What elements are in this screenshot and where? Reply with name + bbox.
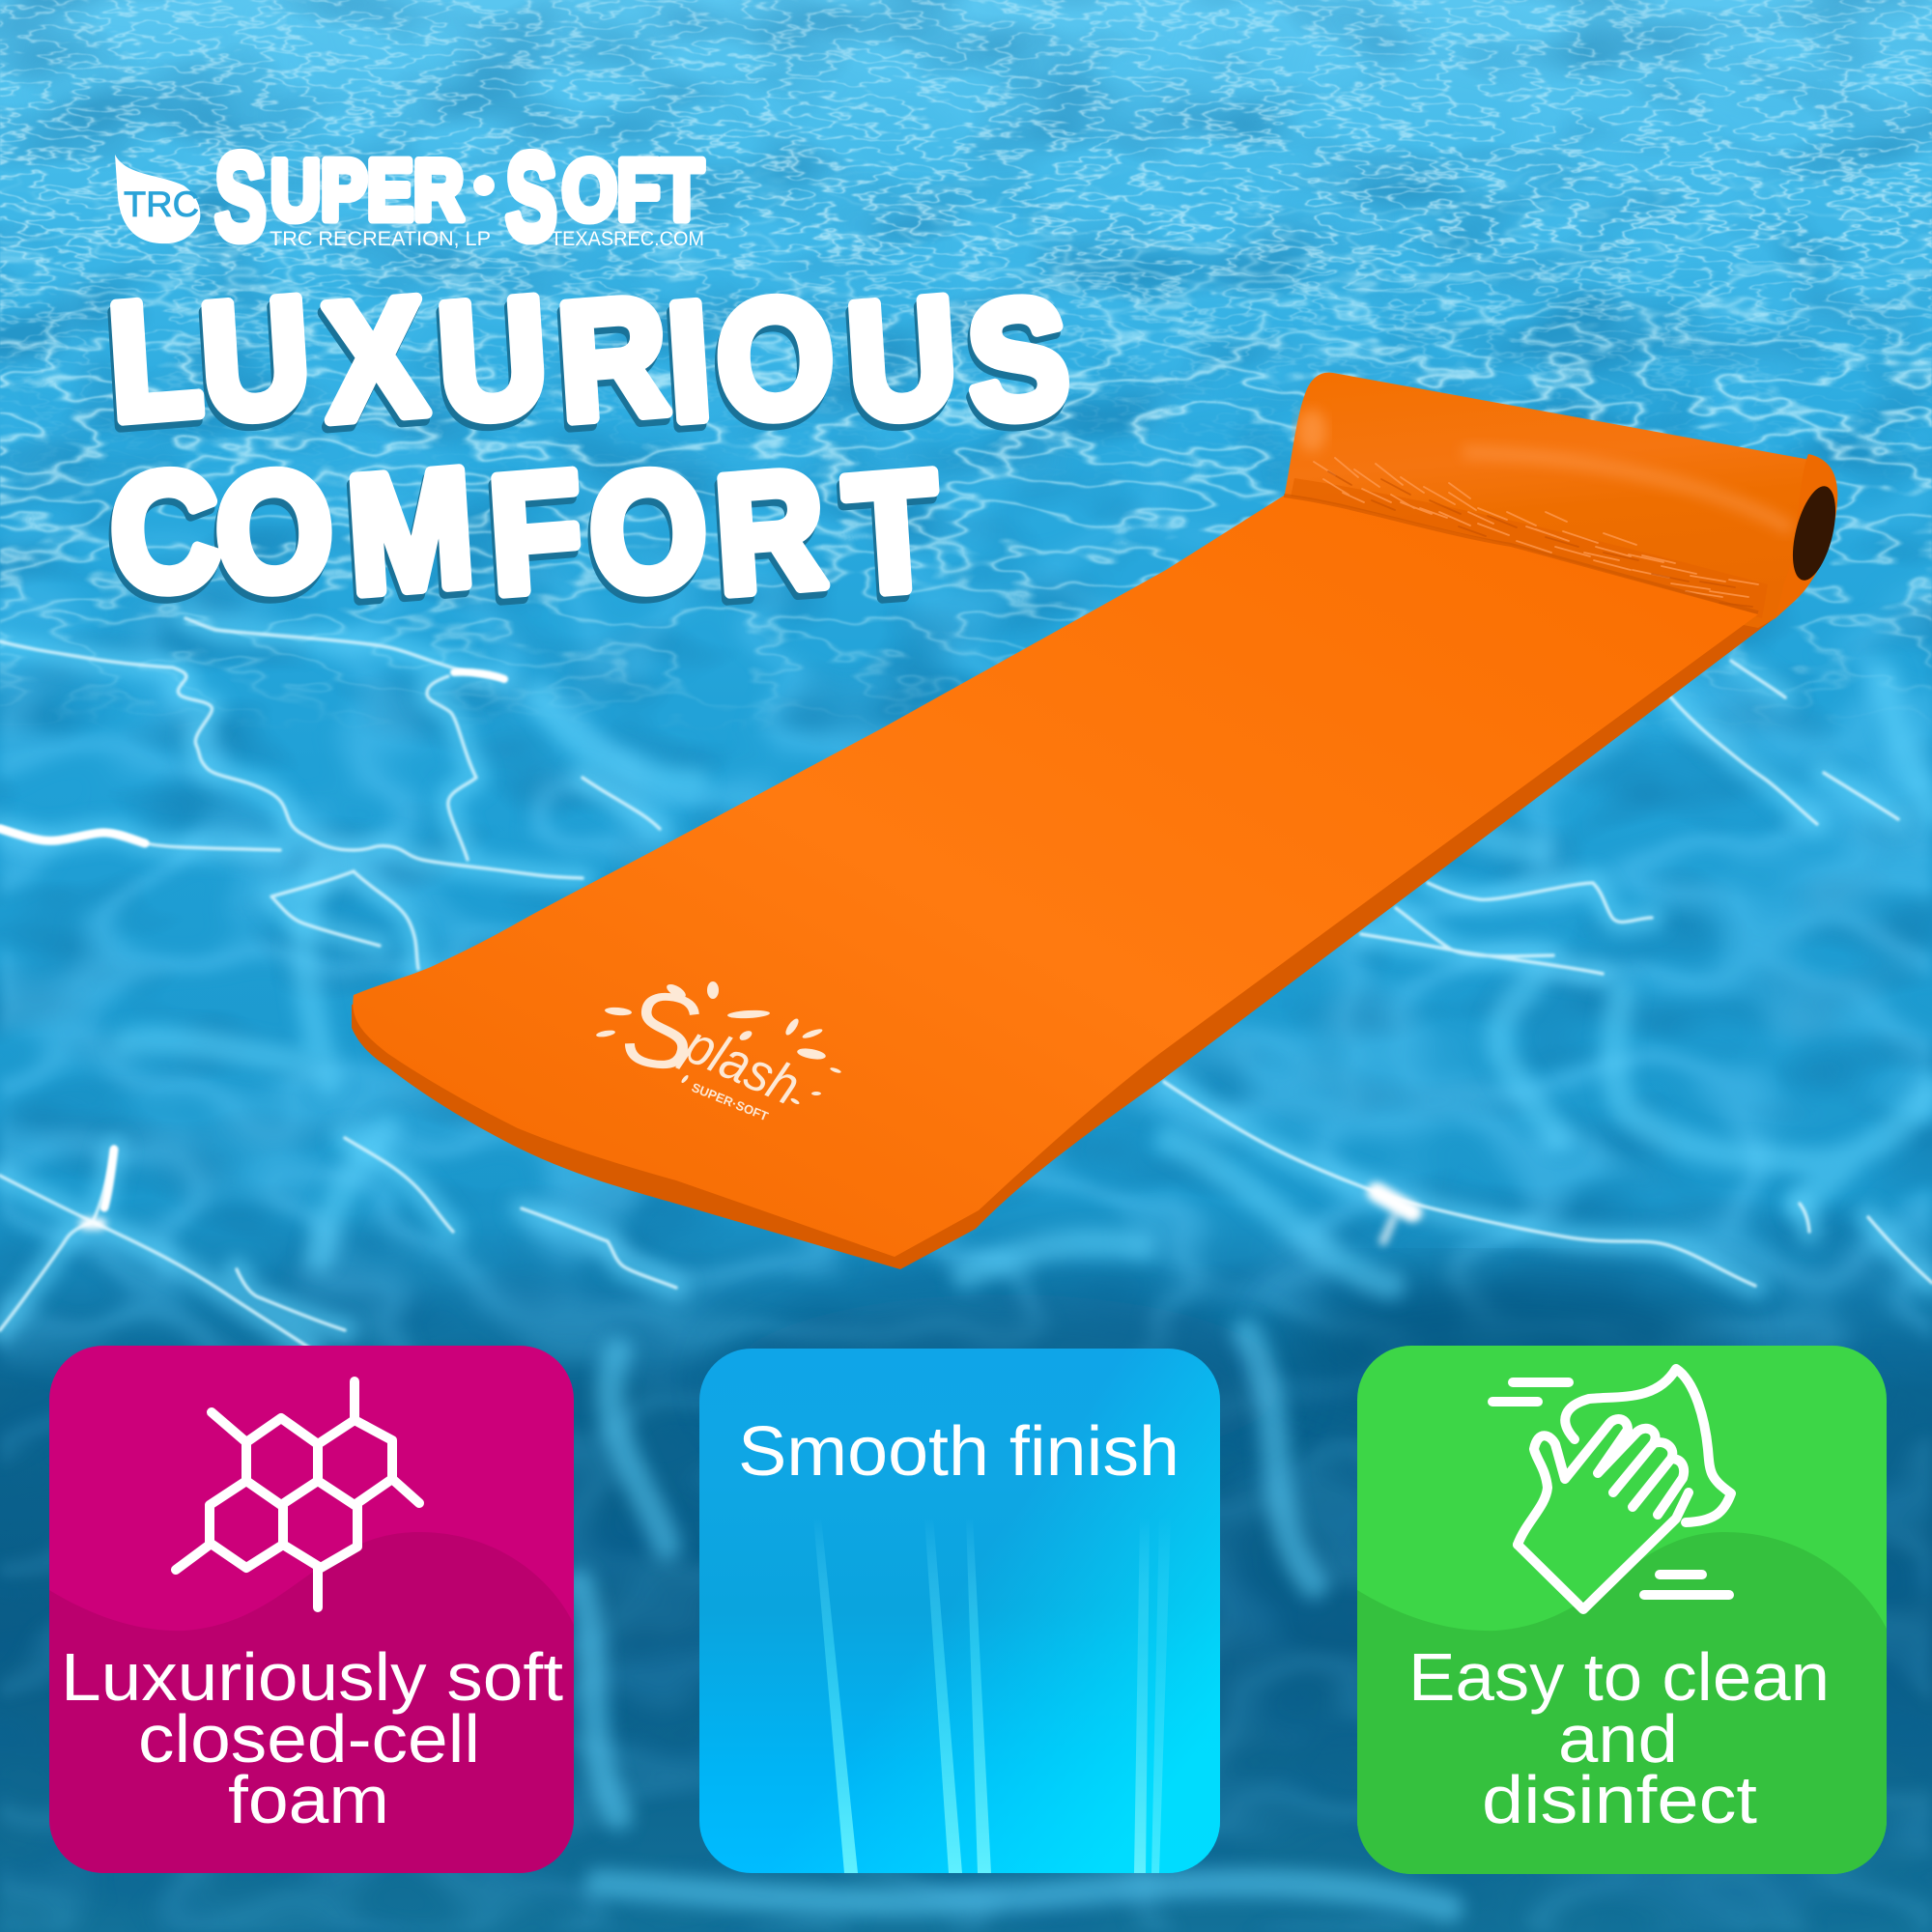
mat edge streaks (813, 1517, 1171, 1873)
icon: hand wiping with cloth (1518, 1369, 1731, 1609)
panel text: and (1558, 1701, 1678, 1776)
wordmark: Super-Soft: S (505, 128, 557, 267)
logo: TRC Super-Soft (115, 128, 704, 267)
pillow end cap (1776, 454, 1837, 618)
fold shadow (1284, 496, 1758, 612)
pillow crease band (1290, 478, 1768, 618)
pillow roll (1284, 373, 1844, 628)
icon: motion dashes (1492, 1382, 1729, 1595)
logo tagline left: TRC RECREATION, LP (270, 228, 491, 250)
product: orange foam mat (352, 373, 1844, 1269)
panel text: Easy to clean (1408, 1639, 1830, 1715)
panel: closed-cell foam (49, 1346, 574, 1873)
logo tagline right: TEXASREC.COM (551, 228, 704, 250)
panel text: disinfect (1482, 1762, 1757, 1837)
panel text: Luxuriously soft (61, 1639, 563, 1715)
title line 2: COMFORT (105, 434, 944, 629)
panel text (1408, 1639, 1830, 1837)
panel: easy to clean (1357, 1346, 1887, 1874)
panel text: closed-cell (138, 1701, 480, 1776)
title line 1: LUXURIOUS (103, 261, 1074, 456)
mat top surface (353, 496, 1758, 1257)
wordmark: Super-Soft: S (214, 128, 267, 267)
splash logo: plash (674, 1012, 809, 1117)
title shadow: LUXURIOUS (101, 268, 1071, 463)
icon: TRC drop: TRC (124, 185, 199, 224)
pillow highlight (1468, 452, 1787, 526)
splash droplets (596, 981, 841, 1105)
splash logo: SUPER·SOFT (690, 1080, 770, 1123)
title shadow: COMFORT (102, 440, 941, 636)
panel: smooth finish (699, 1349, 1220, 1873)
panel wave (49, 1532, 574, 1873)
wordmark: Super-Soft: OFT (562, 142, 703, 238)
panel text: foam (228, 1762, 389, 1837)
title shadow (101, 268, 1071, 636)
panel text (61, 1639, 563, 1837)
pillow texture (1314, 458, 1758, 597)
icon: TRC drop (115, 155, 200, 243)
wordmark: Super-Soft: UPER (270, 142, 464, 238)
icon: honeycomb molecule (176, 1381, 419, 1607)
title: Luxurious Comfort (101, 261, 1074, 636)
splash logo: S (614, 965, 707, 1096)
wordmark: Super-Soft (214, 128, 703, 267)
pillow hole (1784, 482, 1844, 584)
panel text: Smooth finish (738, 1413, 1179, 1491)
mat side edge (352, 604, 1775, 1269)
splash logo (596, 965, 841, 1123)
panel wave (1357, 1532, 1887, 1874)
